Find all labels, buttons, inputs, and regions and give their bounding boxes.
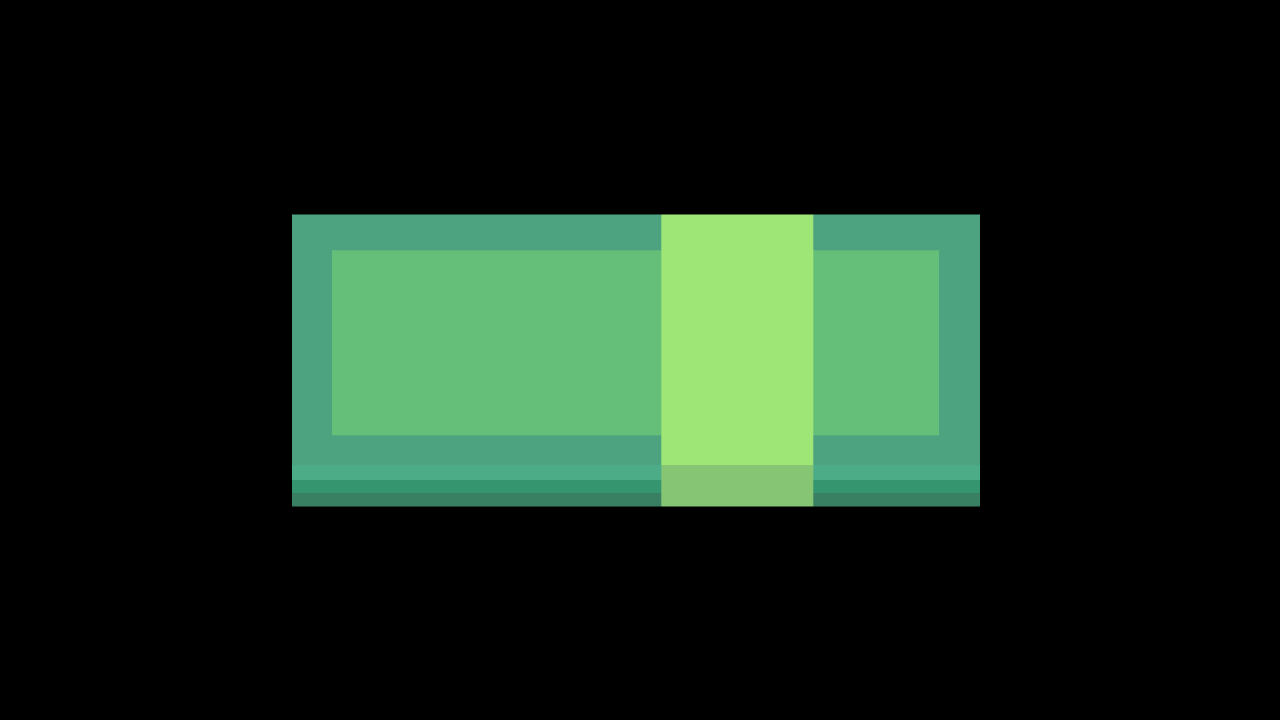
banknote inner panel bbox=[332, 250, 939, 435]
stack edge: bottom layer bbox=[292, 493, 980, 506]
paper band: front bbox=[661, 214, 813, 465]
paper band: lower edge bbox=[661, 465, 813, 506]
banknote frame bbox=[292, 214, 980, 466]
stack edge: top layer bbox=[292, 465, 980, 480]
stack edge: middle layer bbox=[292, 480, 980, 493]
